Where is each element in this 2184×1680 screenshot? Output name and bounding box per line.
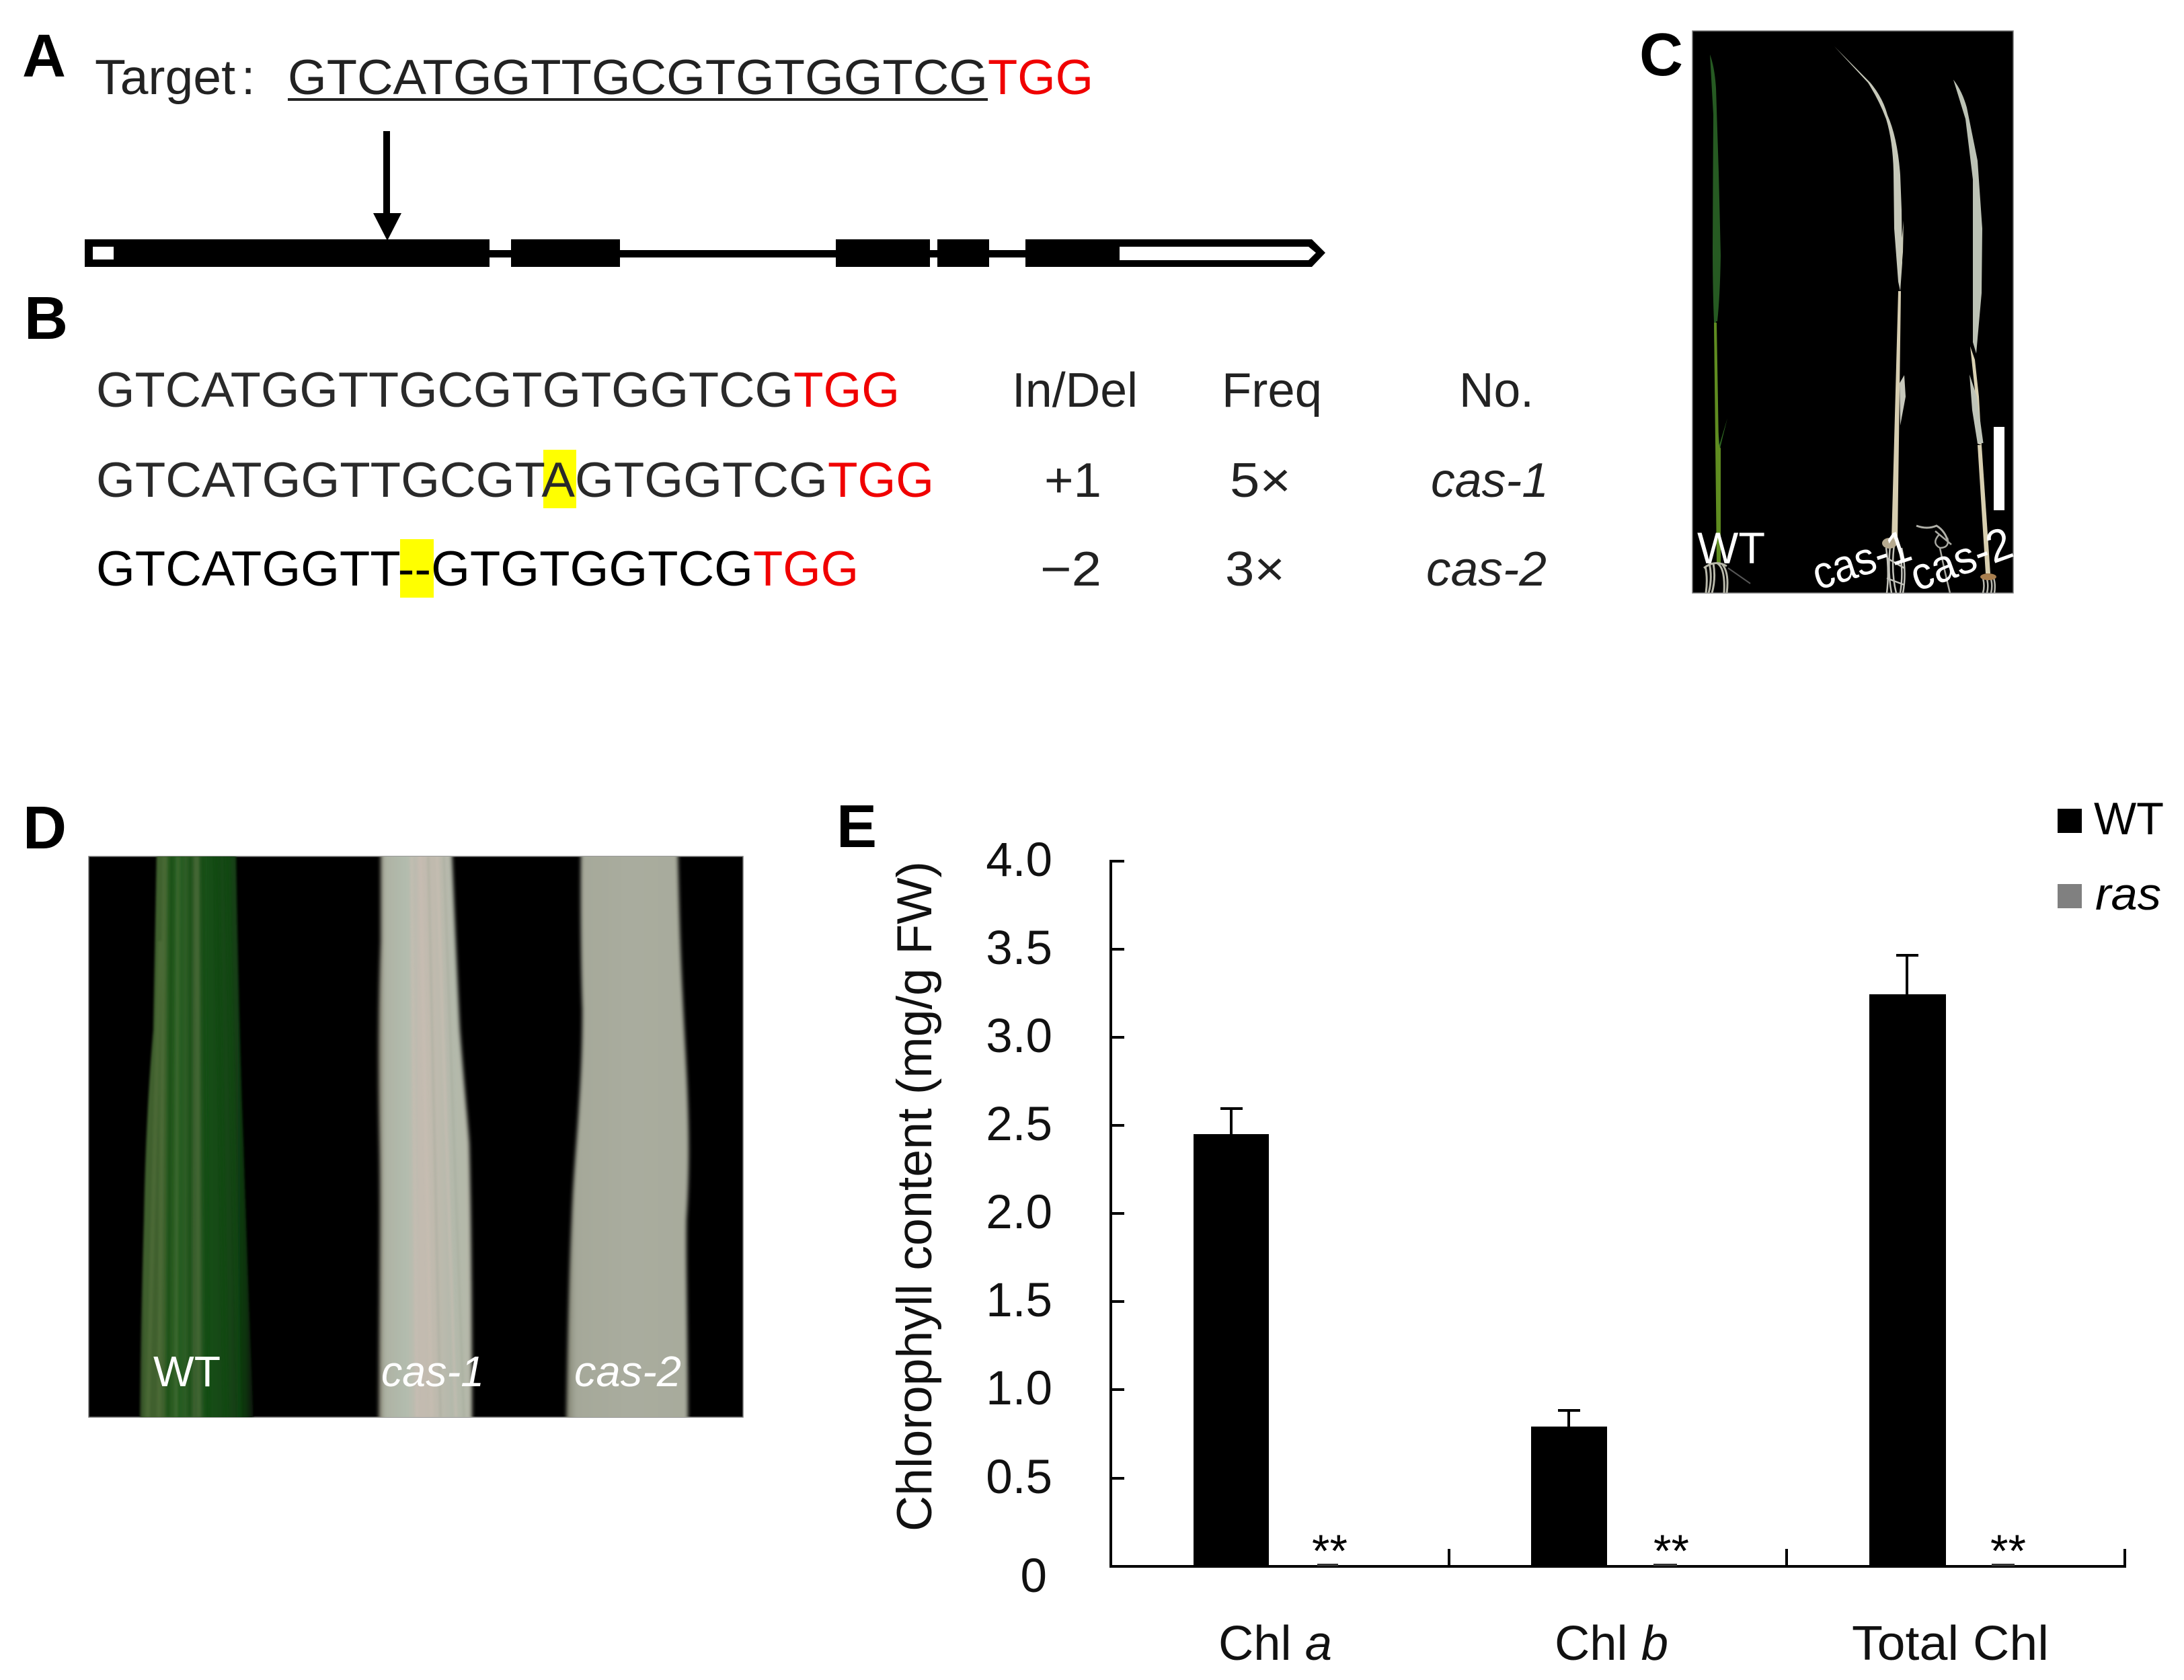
WT seedling (1704, 54, 1750, 593)
target sequence: TGG (988, 50, 1093, 105)
y axis tick labels: 4.0 (986, 834, 1052, 887)
x axis category labels: Chl b (1555, 1617, 1668, 1671)
gene structure (85, 239, 1325, 267)
group: Chl b bars (1531, 1410, 1689, 1576)
seedling labels: WT (1697, 523, 1765, 573)
column headers: Freq (1222, 364, 1322, 417)
y axis tick labels (986, 834, 1052, 1603)
column headers: In/Del (1012, 364, 1138, 417)
WT leaf (140, 850, 254, 1424)
target sequence (95, 50, 1093, 105)
cas-1 seedling (1834, 46, 1906, 593)
wild type sequence row: TGG (793, 363, 900, 417)
cas-2 values: 3× (1225, 543, 1285, 596)
leaf labels (153, 1347, 681, 1396)
y axis tick labels: 2.5 (986, 1098, 1052, 1151)
cas-1 sequence row: GTCATGGTTGCGTAGTGGTCG (96, 453, 828, 508)
cas-2 values (1040, 543, 1547, 596)
cas-1 values: 5× (1230, 454, 1291, 508)
seedling labels: cas-2 (1903, 517, 2019, 601)
cas-2 leaf (566, 850, 689, 1424)
y axis title: Chlorophyll content (mg/g FW) (888, 861, 942, 1531)
group: Total Chl bars (1869, 955, 2026, 1576)
y axis tick labels: 1.5 (986, 1274, 1052, 1327)
cas-2 values: cas-2 (1426, 543, 1547, 596)
arrow: target position (373, 131, 401, 241)
cas-2 sequence row: TGG (753, 542, 859, 596)
scale bar (1994, 427, 2004, 510)
panel C: whole seedlings photo (1692, 31, 2019, 601)
x axis category labels: Chl a (1218, 1617, 1332, 1671)
wild type sequence row: GTCATGGTTGCGTGTGGTCG (96, 363, 793, 417)
y axis tick labels: 2.0 (986, 1186, 1052, 1239)
panel B: mutation table (96, 363, 1549, 598)
seedling labels: cas-1 (1805, 520, 1917, 600)
panel label B: B (24, 285, 68, 352)
y axis tick labels: 1.0 (986, 1362, 1052, 1415)
group: Chl a bars (1194, 1109, 1348, 1576)
panel label D: D (23, 795, 67, 862)
target sequence: : (241, 50, 255, 105)
target sequence: GTCATGGTTGCGTGTGGTCG (288, 50, 988, 105)
x axis category labels (1218, 1617, 2049, 1671)
seedling labels (1697, 517, 2019, 601)
panel E: chlorophyll bar chart (888, 793, 2164, 1671)
leaf labels: WT (153, 1347, 221, 1396)
cas-1 leaf (379, 850, 472, 1424)
x axis category labels: Total Chl (1852, 1617, 2049, 1671)
cas-2 values: −2 (1040, 543, 1101, 596)
cas-1 values (1044, 454, 1549, 508)
cas-2 seedling (1916, 79, 1996, 593)
panel label E: E (836, 793, 877, 861)
axes (1109, 860, 2126, 1568)
y axis tick labels: 3.0 (986, 1010, 1052, 1063)
panel A: target site and gene model (85, 50, 1325, 267)
column headers: No. (1459, 364, 1534, 417)
group: Chl a bars: ** (1312, 1525, 1348, 1576)
panel label C: C (1639, 22, 1683, 89)
legend (2058, 793, 2164, 920)
leaf labels: cas-1 (381, 1347, 484, 1396)
group: Chl b bars: ** (1653, 1525, 1689, 1576)
group: Total Chl bars: ** (1990, 1525, 2026, 1576)
cas-1 sequence row: TGG (828, 453, 934, 508)
column headers (1012, 364, 1534, 417)
cas-1 values: cas-1 (1431, 454, 1549, 508)
leaf labels: cas-2 (574, 1347, 681, 1396)
y axis tick labels: 3.5 (986, 922, 1052, 975)
panel D: leaf close-up photo (89, 850, 743, 1424)
cas-2 sequence row: GTCATGGTT--GTGTGGTCG (96, 542, 753, 596)
y axis tick labels: 0.5 (986, 1451, 1052, 1504)
target sequence: Target (95, 50, 235, 105)
panel label A: A (22, 23, 66, 90)
legend: ras (2095, 869, 2161, 920)
y axis tick labels: 0 (1021, 1550, 1047, 1603)
cas-1 values: +1 (1044, 454, 1101, 508)
legend: WT (2094, 793, 2164, 844)
